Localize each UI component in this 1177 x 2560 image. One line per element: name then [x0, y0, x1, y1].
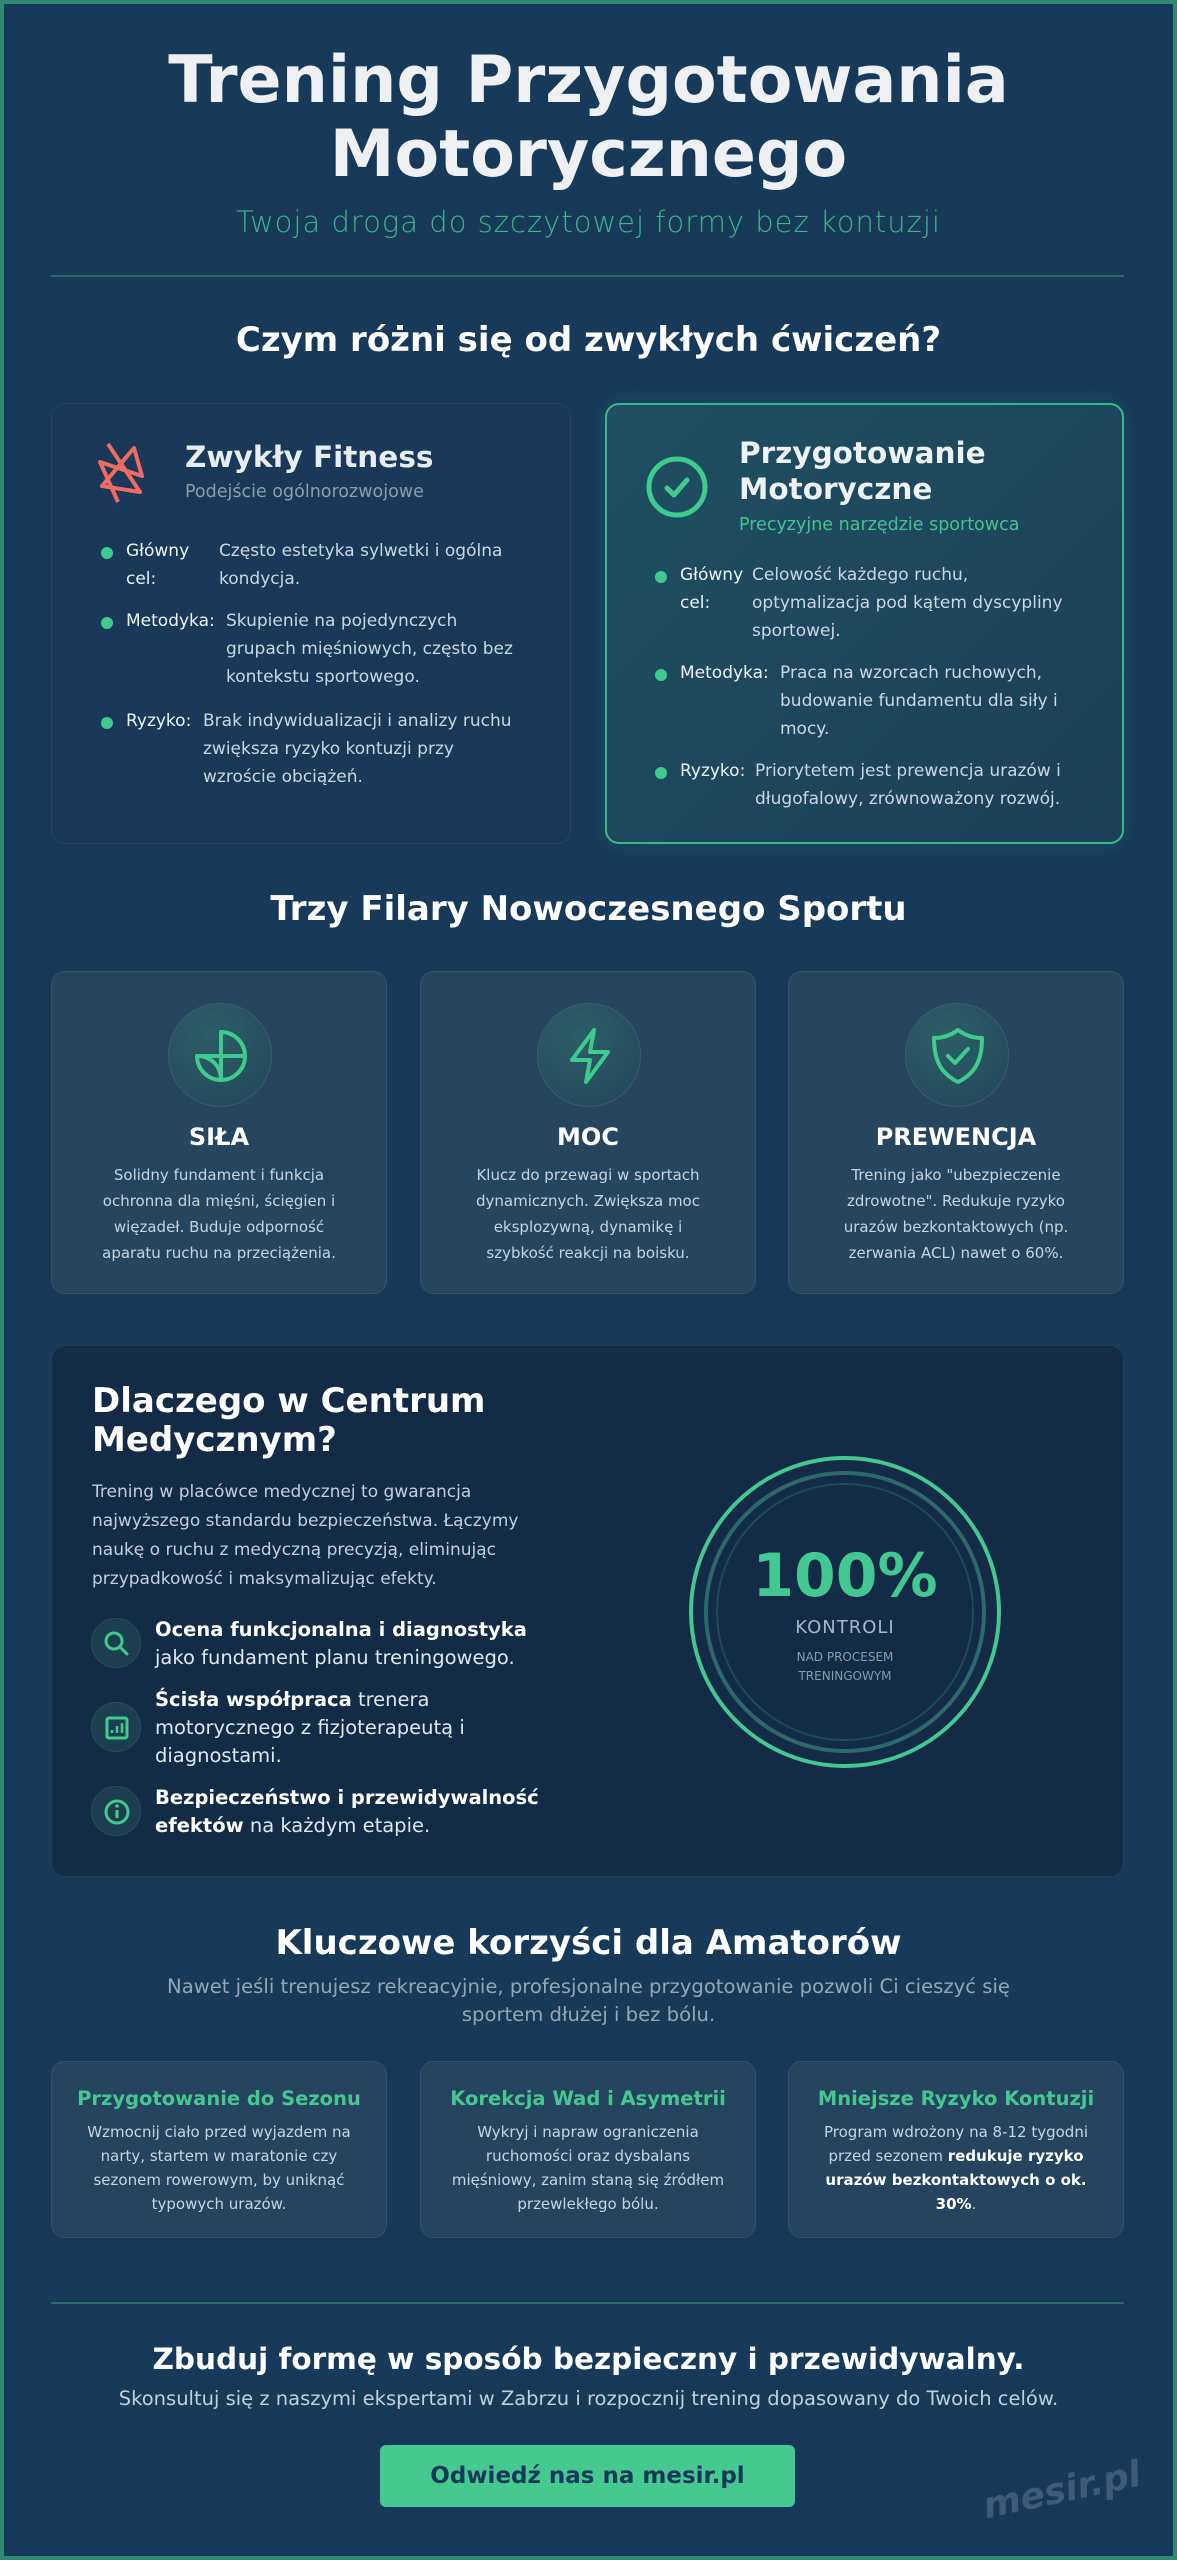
pillar: prewencja: Trening jako "ubezpieczenie zdrowotne". Redukuje ryzyko urazów bezkontaktowych (np. zerwania ACL) nawet o 60%.: [844, 1166, 1068, 1262]
panel: przygotowanie motoryczne: Ryzyko:: [680, 761, 745, 781]
heading: Medycznym?: [92, 1420, 337, 1460]
CTA button: Odwiedź nas na mesir.pl: [430, 2463, 745, 2489]
benefit: correction: Korekcja Wad i Asymetrii: [450, 2087, 726, 2110]
chart: 100% control circle: TRENINGOWYM: [798, 1669, 892, 1683]
icon: chart: [91, 1702, 141, 1752]
icon: broken star: [98, 442, 144, 503]
pillar: siła: Solidny fundament i funkcja ochronna dla mięśni, ścięgien i więzadeł. Buduje odporność aparatu ruchu na przeciążenia.: [102, 1166, 336, 1262]
chart: 100% control circle: KONTROLI: [795, 1617, 895, 1638]
panel: zwykły fitness: [51, 403, 571, 844]
heading: pillars: Trzy Filary Nowoczesnego Sportu: [270, 889, 907, 929]
title: Motoryczne: [739, 472, 932, 506]
icon: search: [91, 1618, 141, 1668]
panel: zwykły fitness: Ryzyko:: [126, 711, 191, 731]
benefit: correction: Wykryj i napraw ograniczenia ruchomości oraz dysbalans mięśniowy, zanim staną się źródłem przewlekłego bólu.: [452, 2123, 724, 2213]
watermark: mesir.pl: [979, 2454, 1145, 2527]
title: [739, 436, 986, 506]
chart: 100% control circle: 100%: [752, 1541, 938, 1611]
subtitle: Precyzyjne narzędzie sportowca: [739, 515, 1019, 535]
pillar: prewencja: PREWENCJA: [876, 1123, 1036, 1151]
pillar: moc: [420, 971, 756, 1294]
text block: Trening w placówce medycznej to gwarancja najwyższego standardu bezpieczeństwa. Łączymy naukę o ruchu z medyczną precyzją, eliminując przypadkowość i maksymalizując efekty.: [92, 1482, 518, 1589]
bullet: diagnostics: Ocena funkcjonalna i diagnostyka jako fundament planu treningowego.: [155, 1618, 527, 1669]
panel: zwykły fitness: Metodyka:: [126, 611, 215, 631]
panel: zwykły fitness: Brak indywidualizacji i analizy ruchu zwiększa ryzyko kontuzji przy wzroście obciążeń.: [203, 711, 512, 787]
panel: przygotowanie motoryczne: Praca na wzorcach ruchowych, budowanie fundamentu dla siły i mocy.: [780, 663, 1058, 739]
bullets: cel:: [680, 593, 710, 613]
icon: strength: [168, 1003, 272, 1107]
title: Zwykły Fitness: [185, 440, 433, 474]
chart: 100% control circle: NAD PROCESEM: [797, 1650, 893, 1664]
title: [168, 43, 1009, 192]
title: Przygotowanie: [739, 436, 986, 470]
title: Trening Przygotowania: [168, 43, 1009, 118]
benefit: season: Przygotowanie do Sezonu: [77, 2087, 361, 2110]
heading: [92, 1381, 485, 1460]
pillar: siła: SIŁA: [189, 1123, 249, 1151]
pillar: moc: MOC: [557, 1123, 619, 1151]
panel: przygotowanie motoryczne: [605, 403, 1124, 844]
bullet: cooperation: Ścisła współpraca trenera motorycznego z fizjoterapeutą i diagnostami.: [155, 1688, 465, 1767]
icon: lightning: [537, 1003, 641, 1107]
icon: check circle: [646, 456, 708, 518]
CTA button: [380, 2445, 795, 2507]
panel: przygotowanie motoryczne: Priorytetem jest prewencja urazów i długofalowy, zrównoważony rozwój.: [755, 761, 1061, 809]
bullets: cel:: [126, 569, 156, 589]
chart: 100% control circle: [689, 1456, 1001, 1768]
pillar: siła: [51, 971, 387, 1294]
benefits subtitle: Nawet jeśli trenujesz rekreacyjnie, profesjonalne przygotowanie pozwoli Ci cieszyć się sportem dłużej i bez bólu.: [167, 1975, 1010, 2026]
bullets: Często estetyka sylwetki i ogólna kondycja.: [219, 541, 502, 589]
icon: shield: [905, 1003, 1009, 1107]
benefit: season: Wzmocnij ciało przed wyjazdem na narty, startem w maratonie czy sezonem rowerowym, by uniknąć typowych urazów.: [87, 2123, 351, 2213]
CTA text: Skonsultuj się z naszymi ekspertami w Zabrzu i rozpocznij trening dopasowany do Twoich celów.: [119, 2387, 1058, 2410]
benefit: injury risk: Mniejsze Ryzyko Kontuzji: [818, 2087, 1094, 2110]
heading: benefits: Kluczowe korzyści dla Amatorów: [275, 1923, 902, 1963]
bullet: safety: Bezpieczeństwo i przewidywalność efektów na każdym etapie.: [155, 1786, 539, 1837]
panel: przygotowanie motoryczne: Metodyka:: [680, 663, 769, 683]
CTA heading: Zbuduj formę w sposób bezpieczny i przewidywalny.: [152, 2342, 1024, 2376]
subtitle: Podejście ogólnorozwojowe: [185, 482, 424, 502]
panel: zwykły fitness: Skupienie na pojedynczych grupach mięśniowych, często bez kontekstu sportowego.: [226, 611, 513, 687]
benefit: correction: [420, 2061, 756, 2238]
bullets: Celowość każdego ruchu, optymalizacja pod kątem dyscypliny sportowej.: [752, 565, 1062, 641]
heading: Dlaczego w Centrum: [92, 1381, 485, 1421]
title: Motorycznego: [330, 117, 847, 192]
bullets: Główny: [126, 541, 189, 561]
pillar: prewencja: [788, 971, 1124, 1294]
benefit: season: [51, 2061, 387, 2238]
heading: comparison: Czym różni się od zwykłych ćwiczeń?: [236, 320, 941, 360]
bullets: Główny: [680, 565, 743, 585]
benefit: injury risk: [788, 2061, 1124, 2238]
subtitle: Twoja droga do szczytowej formy bez kontuzji: [236, 205, 941, 239]
panel: medical center: [51, 1345, 1124, 1877]
benefit: injury risk: Program wdrożony na 8-12 tygodni przed sezonem redukuje ryzyko urazów bezkontaktowych o ok. 30%.: [824, 2123, 1088, 2213]
icon: info: [91, 1786, 141, 1836]
pillar: moc: Klucz do przewagi w sportach dynamicznych. Zwiększa moc eksplozywną, dynamikę i szybkość reakcji na boisku.: [476, 1166, 700, 1262]
